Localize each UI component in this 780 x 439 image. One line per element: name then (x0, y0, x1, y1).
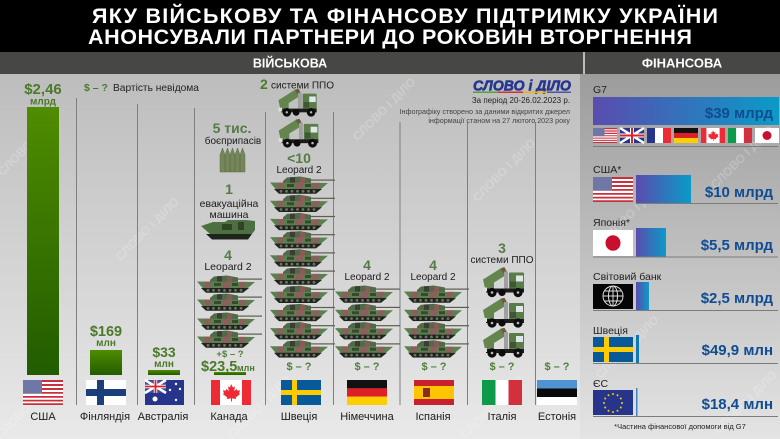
finance row: Sweden: $49,9 млн (702, 342, 773, 359)
finance row: USA: $10 млрд (705, 184, 773, 201)
column: Italy: $ – ? (489, 361, 515, 373)
column: Germany: $ – ? (354, 361, 380, 373)
watermarks: СЛОВО І ДІЛО (598, 178, 667, 247)
column: Italy: системи ППО (470, 255, 534, 266)
finance row: EU (593, 378, 778, 416)
column: Italy: 3 (498, 240, 506, 256)
finance row: World Bank: $2,5 млрд (701, 290, 773, 307)
watermarks: СЛОВО І ДІЛО (593, 313, 662, 382)
title (0, 0, 780, 52)
column: Spain: 4 (429, 257, 437, 273)
tanks (404, 286, 469, 358)
logo and source note: За період 20-26.02.2023 р. (472, 96, 570, 105)
finance row: USA: США* (593, 164, 621, 176)
column: Finland: $169 (90, 324, 122, 340)
icon: globe (603, 286, 623, 306)
column: Sweden: 2 (260, 76, 268, 92)
column: USA: млрд (30, 96, 57, 108)
column dividers (76, 98, 536, 405)
logo and source note: інформації станом на 27 лютого 2023 року (428, 116, 570, 125)
column: Spain: $ – ? (421, 361, 447, 373)
column: Sweden: системи ППО (271, 80, 334, 92)
finance row: G7: G7 (593, 84, 607, 96)
column: Canada: 5 тис. (213, 120, 251, 136)
finance row: Japan (593, 217, 778, 257)
column: Germany (335, 257, 400, 423)
column: Italy: Італія (488, 411, 516, 423)
icon: air defence systems (278, 88, 318, 148)
finance row: G7: $39 млрд (705, 105, 773, 122)
column: Spain (404, 257, 469, 423)
column: Canada: 4 (224, 247, 232, 263)
column: Spain: Leopard 2 (410, 272, 456, 283)
legend: $ – ? (84, 82, 108, 94)
column: USA: США (30, 411, 56, 423)
tanks (335, 286, 400, 358)
column: Sweden: Leopard 2 (276, 165, 322, 176)
finance row: Japan: Японія* (593, 217, 630, 229)
column: Germany: Leopard 2 (344, 272, 390, 283)
column: Australia: Австралія (138, 411, 188, 423)
finance row: G7 (593, 84, 779, 146)
column: Canada: $23,5 (201, 359, 237, 375)
icon: EU stars (603, 393, 623, 413)
icon: evacuation vehicle (201, 220, 255, 240)
column: Sweden: Швеція (281, 411, 317, 423)
column: Finland: Фінляндія (80, 411, 130, 423)
column: Estonia: $ – ? (544, 361, 570, 373)
finance row: Sweden: Швеція (593, 325, 628, 337)
watermarks: СЛОВО І ДІЛО (470, 136, 539, 205)
watermarks: СЛОВО І ДІЛО (708, 123, 777, 192)
G7 flags (593, 128, 779, 143)
column: Canada (197, 120, 262, 423)
section header: military (0, 52, 583, 74)
column: Finland (80, 324, 130, 423)
column: Canada: Leopard 2 (204, 261, 252, 273)
column: USA: $2,46 (24, 81, 62, 98)
column: Canada: боєприпасів (205, 135, 261, 147)
column: Canada: млн (237, 363, 255, 373)
column: Canada: евакуаційна (200, 198, 258, 210)
finance row: Japan: $5,5 млрд (701, 237, 773, 254)
finance row: World Bank (593, 271, 778, 310)
legend (84, 82, 199, 94)
column: Finland: млн (96, 338, 116, 349)
finance row: EU: ЄС (593, 378, 609, 390)
section header: financial (585, 52, 780, 74)
legend: Вартість невідома (113, 83, 199, 94)
logo and source note: Інфографіку створено за даними відкритих джерел (400, 107, 570, 116)
column: Estonia (537, 361, 577, 423)
column: Australia (138, 344, 188, 423)
column: Germany: Німеччина (340, 411, 395, 423)
column: Italy (470, 240, 534, 423)
column: Sweden: $ – ? (286, 361, 312, 373)
icon: shells (220, 148, 245, 172)
section header: financial: ФІНАНСОВА (642, 56, 723, 70)
icon: air defence systems (483, 267, 524, 358)
title: АНОНСУВАЛИ ПАРТНЕРИ ДО РОКОВИН ВТОРГНЕННЯ (88, 25, 692, 49)
footnote: *Частина фінансової допомоги від G7 (614, 422, 746, 431)
column: Canada: 1 (225, 181, 233, 197)
logo and source note: СЛОВО і ДІЛО (473, 78, 571, 94)
column: Australia: млн (154, 359, 174, 370)
title: ЯКУ ВІЙСЬКОВУ ТА ФІНАНСОВУ ПІДТРИМКУ УКРАЇНИ (92, 3, 718, 28)
column: Australia: $33 (152, 344, 176, 360)
column: USA (23, 81, 63, 423)
column: Sweden (260, 76, 335, 423)
watermarks: СЛОВО І ДІЛО (350, 75, 419, 144)
section header: military: ВІЙСЬКОВА (253, 56, 327, 70)
finance row: World Bank: Світовий банк (593, 271, 662, 283)
column: Canada: машина (210, 209, 249, 221)
finance row: EU: $18,4 млн (702, 396, 773, 413)
column: Canada: +$ – ? (216, 349, 244, 360)
column: Spain: Іспанія (415, 411, 451, 423)
tanks (270, 176, 335, 358)
column: Germany: 4 (363, 257, 371, 273)
column: Sweden: <10 (287, 150, 311, 166)
logo and source note (400, 78, 571, 125)
finance row: Sweden (593, 325, 778, 364)
column: Canada: Канада (210, 411, 249, 423)
finance row: USA (593, 164, 778, 204)
watermarks: СЛОВО І ДІЛО (711, 368, 780, 437)
tanks (197, 276, 262, 348)
column: Estonia: Естонія (538, 411, 576, 423)
watermarks: СЛОВО І ДІЛО (113, 195, 182, 264)
